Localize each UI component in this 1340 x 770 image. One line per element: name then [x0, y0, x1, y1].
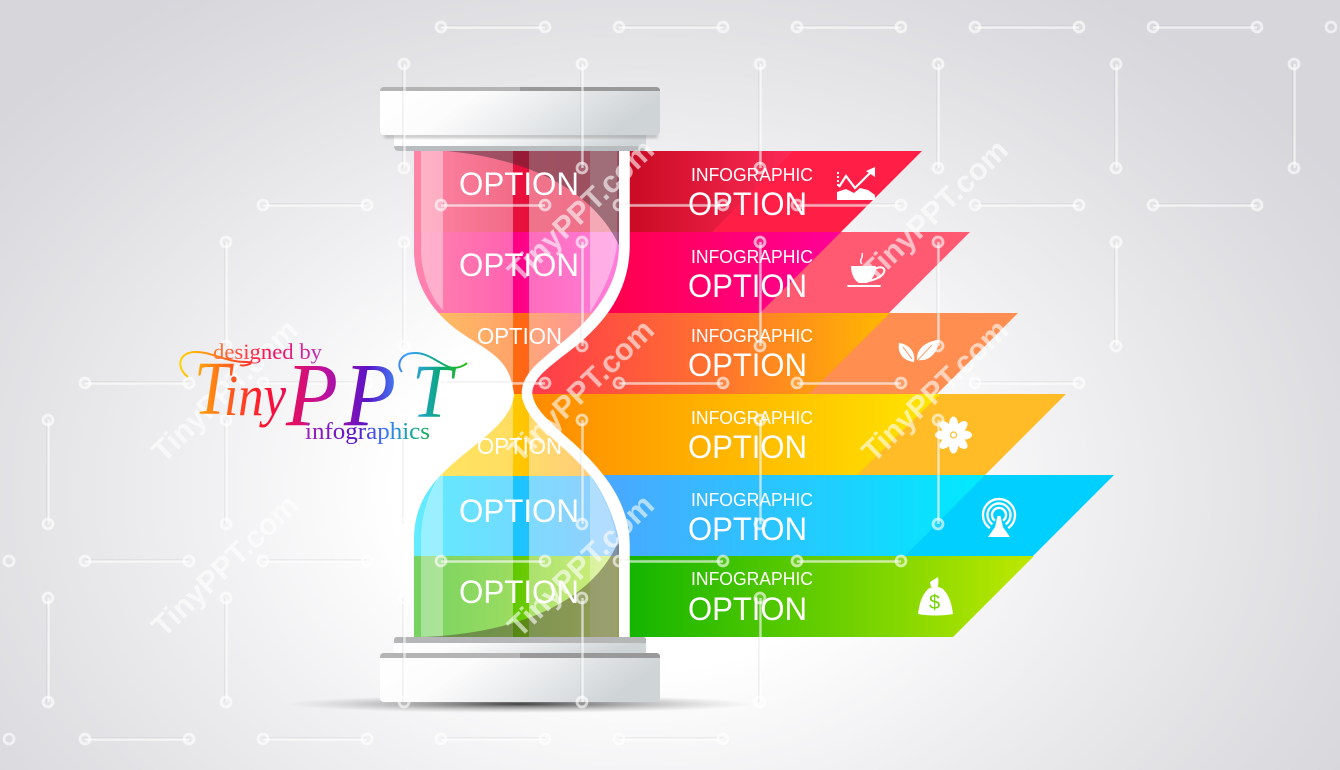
band 4 text	[688, 408, 813, 465]
band text	[688, 165, 813, 627]
logo: designed by TinyPPT infographics: P	[285, 346, 338, 445]
glass option labels	[459, 166, 579, 610]
watermarks: TinyPPT.com	[501, 488, 661, 644]
band 6 text	[688, 569, 813, 627]
band 2 text: OPTION	[688, 268, 807, 304]
icon: antenna	[983, 499, 1015, 537]
hourglass glass body	[410, 151, 625, 637]
icon: leaves	[899, 340, 939, 363]
label 1: OPTION	[459, 166, 579, 202]
floor shadow	[285, 695, 755, 713]
icon: money bag	[918, 577, 953, 616]
band 5 text: OPTION	[688, 511, 807, 547]
band 2 text	[688, 247, 813, 304]
label 5: OPTION	[459, 493, 579, 529]
band 6: green	[630, 556, 1034, 637]
logo: designed by TinyPPT infographics: iny	[224, 363, 286, 428]
icon: rising chart	[837, 167, 875, 200]
logo: designed by TinyPPT infographics: P	[343, 346, 396, 445]
watermarks: TinyPPT.com	[501, 313, 661, 469]
watermarks: TinyPPT.com	[145, 488, 305, 644]
logo flourishes	[180, 352, 467, 377]
band 1: red	[630, 151, 922, 232]
logo: designed by TinyPPT infographics: designed by	[213, 339, 322, 364]
top cap	[380, 87, 660, 151]
colored option bands	[500, 151, 1114, 637]
band 1 text: OPTION	[688, 186, 807, 222]
watermarks	[145, 133, 1015, 644]
band 5 text	[688, 490, 813, 547]
label 6: OPTION	[459, 574, 579, 610]
icon: coffee cup	[847, 253, 884, 287]
logo: designed by TinyPPT infographics: T	[194, 347, 234, 431]
logo: designed by TinyPPT infographics	[180, 339, 467, 445]
band 6 text: INFOGRAPHIC	[691, 569, 813, 589]
band 3 text	[688, 326, 813, 383]
bottom cap	[380, 637, 660, 702]
logo: designed by TinyPPT infographics: infographics	[305, 419, 430, 445]
watermarks: TinyPPT.com	[501, 133, 661, 289]
band 2: pink	[608, 232, 970, 313]
hourglass white outline	[527, 151, 624, 637]
icon: flower	[935, 416, 972, 454]
band 3: orange	[500, 313, 1018, 394]
icon: money bag: $	[929, 592, 940, 614]
band 4 text: INFOGRAPHIC	[691, 408, 813, 428]
watermarks: TinyPPT.com	[855, 313, 1015, 469]
band 5 text: INFOGRAPHIC	[691, 490, 813, 510]
band 6 text: OPTION	[688, 591, 807, 627]
label 2: OPTION	[459, 247, 579, 283]
label 4: OPTION	[477, 433, 562, 459]
label 3: OPTION	[477, 323, 562, 349]
logo: designed by TinyPPT infographics: T	[412, 350, 456, 434]
band 2 text: INFOGRAPHIC	[691, 247, 813, 267]
watermarks: TinyPPT.com	[855, 133, 1015, 289]
band 4 text: OPTION	[688, 429, 807, 465]
band 3 text: INFOGRAPHIC	[691, 326, 813, 346]
band 5: blue	[603, 475, 1114, 556]
band 3 text: OPTION	[688, 347, 807, 383]
band 1 text	[688, 165, 813, 222]
band 1 text: INFOGRAPHIC	[691, 165, 813, 185]
band 4: yellow	[500, 394, 1066, 475]
watermarks: TinyPPT.com	[145, 313, 305, 469]
